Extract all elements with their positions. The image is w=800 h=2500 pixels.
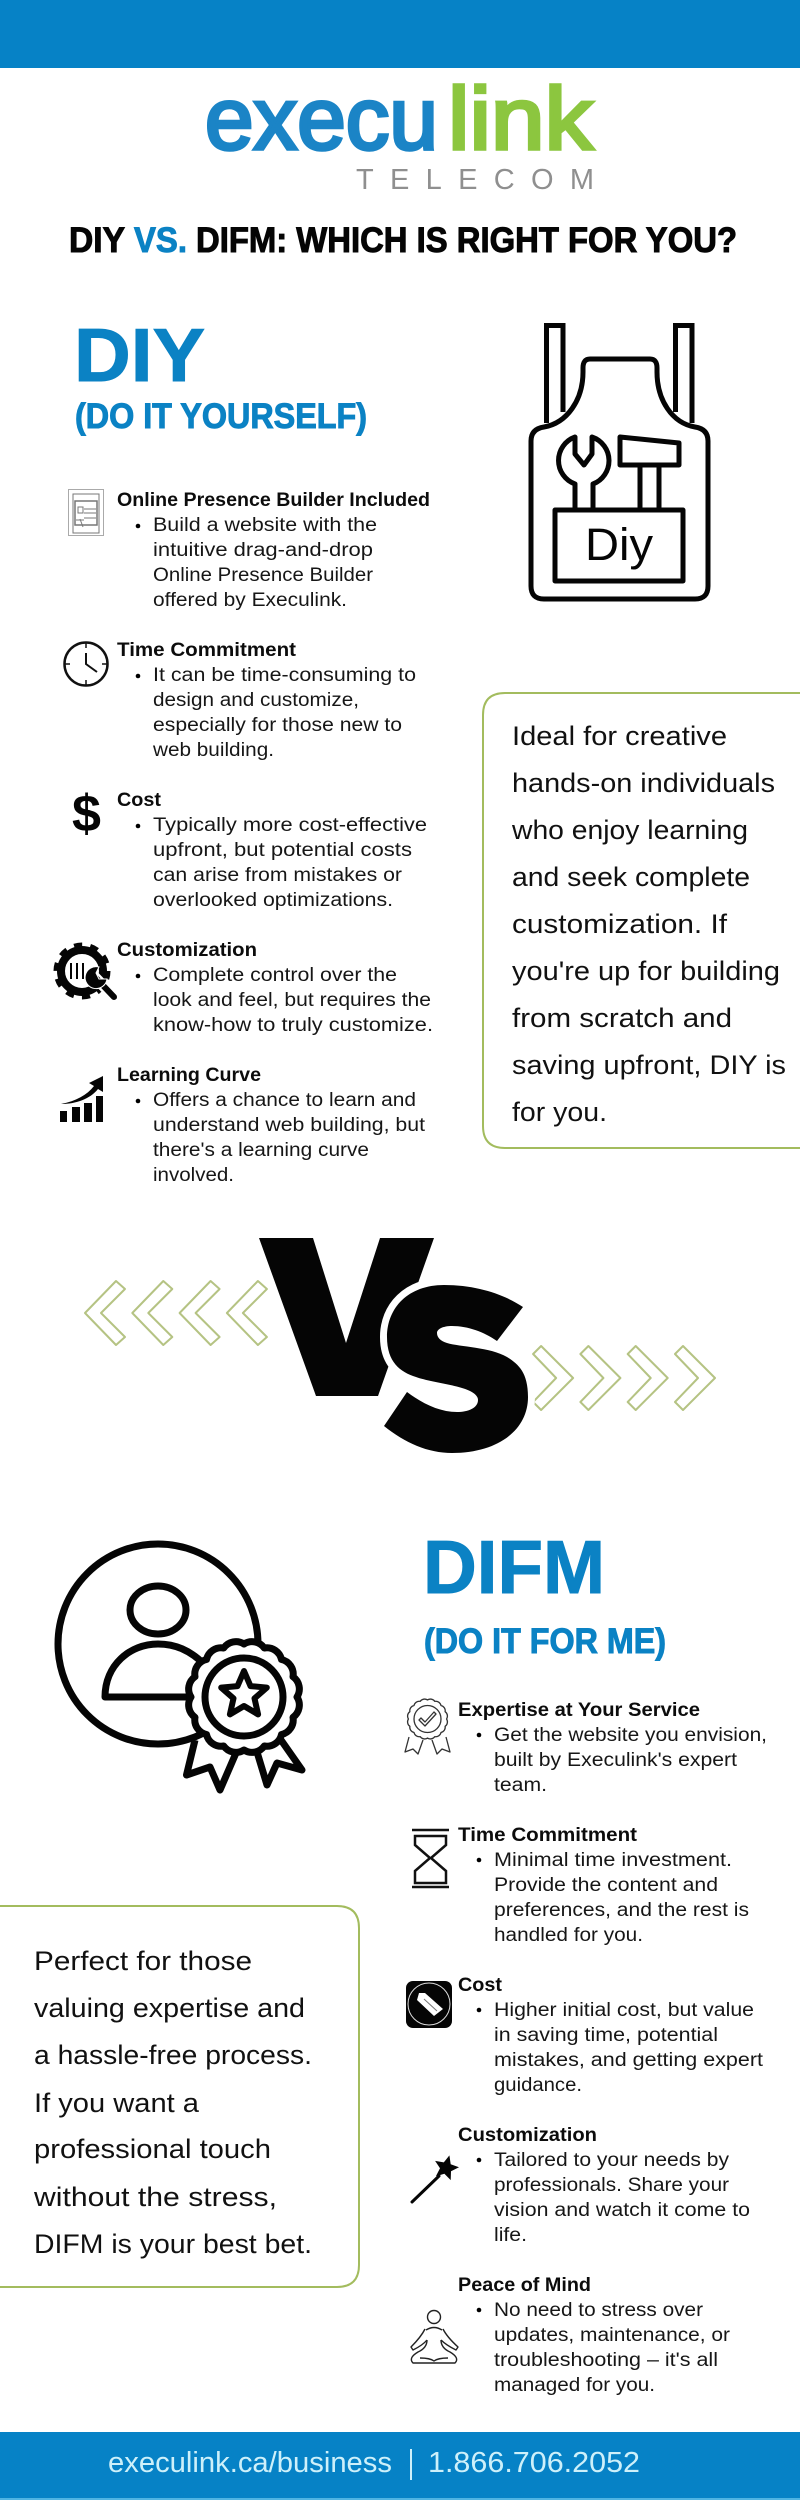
bullet text: Tailored to your needs by — [494, 2150, 730, 2171]
bullet text: preferences, and the rest is — [494, 1900, 749, 1921]
bullet text: Provide the content and — [494, 1875, 718, 1896]
callout: who DIY suits: and seek complete — [512, 862, 750, 892]
bullet text: guidance. — [494, 2075, 582, 2096]
bullet text — [477, 2150, 750, 2246]
panel: DIY feature list — [56, 489, 433, 1186]
bullet text: team. — [494, 1775, 547, 1796]
bullet text: understand web building, but — [153, 1115, 426, 1136]
bullet text: updates, maintenance, or — [494, 2325, 731, 2346]
item: time commitment — [412, 1824, 749, 1946]
arrows: right chevrons — [533, 1346, 715, 1410]
heading: Cost — [117, 789, 162, 811]
bullet text — [136, 815, 427, 911]
bullet text: upfront, but potential costs — [153, 840, 412, 861]
callout: who DIFM suits: If you want a — [34, 2088, 200, 2118]
callout: who DIFM suits: Perfect for those — [34, 1946, 252, 1976]
icon: price tag — [406, 1981, 452, 2028]
callout: who DIY suits: for you. — [512, 1097, 607, 1127]
bullet text: Typically more cost-effective — [153, 815, 427, 836]
bullet text: Get the website you envision, — [494, 1725, 767, 1746]
item: time commitment — [64, 639, 416, 761]
callout: who DIY suits: you're up for building — [512, 956, 780, 986]
bullet text — [477, 2300, 731, 2396]
callout: who DIY suits: who enjoy learning — [511, 815, 748, 845]
panel: DIFM feature list — [405, 1699, 767, 2396]
bullet text — [136, 1090, 426, 1186]
bullet text — [477, 1725, 767, 1796]
bullet text: professionals. Share your — [494, 2175, 730, 2196]
item: customization — [412, 2124, 750, 2246]
heading: Peace of Mind — [458, 2274, 591, 2296]
letter V — [259, 1238, 434, 1396]
bullet text: troubleshooting – it's all — [494, 2350, 718, 2371]
bullet text: web building. — [152, 740, 274, 761]
icon: check badge — [405, 1699, 450, 1754]
bullet text: mistakes, and getting expert — [494, 2050, 764, 2071]
bullet text — [136, 515, 377, 611]
title: DIY — [69, 221, 125, 260]
bullet text: built by Execulink's expert — [494, 1750, 738, 1771]
bullet text: It can be time-consuming to — [153, 665, 416, 686]
bullet text: in saving time, potential — [494, 2025, 718, 2046]
item: cost — [406, 1974, 764, 2096]
item: peace of mind — [411, 2274, 731, 2396]
bullet text: life. — [494, 2225, 527, 2246]
heading: DIFM: DIFM — [423, 1525, 605, 1609]
bullet text — [136, 665, 416, 761]
bullet text: Offers a chance to learn and — [153, 1090, 416, 1111]
callout: who DIFM suits: a hassle-free process. — [34, 2040, 312, 2070]
bullet text: Online Presence Builder — [153, 565, 374, 586]
heading: Time Commitment — [117, 639, 297, 661]
bullet text: Build a website with the — [153, 515, 377, 536]
heading: Expertise at Your Service — [458, 1699, 700, 1721]
bullet text: there's a learning curve — [153, 1140, 369, 1161]
icon: meditating person — [411, 2310, 458, 2363]
top banner — [0, 0, 800, 68]
item: learning curve — [60, 1064, 426, 1186]
icon: gear with wrench — [56, 946, 114, 997]
icon: growth chart — [60, 1076, 103, 1122]
heading: Customization — [117, 939, 257, 961]
callout: who DIY suits: Ideal for creative — [512, 721, 727, 751]
bullet text: Complete control over the — [153, 965, 397, 986]
footer bar — [0, 2432, 800, 2500]
item: online presence builder — [68, 489, 430, 611]
heading: Learning Curve — [117, 1064, 261, 1086]
icon: website builder — [68, 490, 104, 536]
icon: magic wand — [412, 2155, 459, 2202]
logo: Execulink Telecom: link — [448, 69, 594, 168]
bullet text: involved. — [153, 1165, 234, 1186]
icon: clock — [64, 642, 108, 686]
callout: who DIFM suits: valuing expertise and — [34, 1993, 305, 2023]
logo: Execulink Telecom: execu — [205, 69, 438, 168]
icon: apron with tools — [531, 326, 708, 599]
bullet text: can arise from mistakes or — [153, 865, 403, 886]
callout: who DIY suits: from scratch and — [512, 1003, 732, 1033]
item: customization — [56, 939, 433, 1036]
callout: who DIY suits — [483, 693, 800, 1148]
callout: who DIY suits: hands-on individuals — [512, 768, 775, 798]
subheading: do it yourself: (DO IT YOURSELF) — [75, 397, 367, 436]
arrows: left chevrons — [85, 1281, 267, 1345]
callout: who DIFM suits: professional touch — [34, 2134, 271, 2164]
title: DIFM: WHICH IS RIGHT FOR YOU? — [196, 221, 737, 260]
bullet text — [136, 965, 433, 1036]
bullet text: look and feel, but requires the — [153, 990, 431, 1011]
callout: who DIY suits: customization. If — [512, 909, 728, 939]
footer contact text: execulink.ca/business — [108, 2447, 392, 2479]
bullet text: managed for you. — [494, 2375, 655, 2396]
heading: Online Presence Builder Included — [117, 489, 430, 511]
logo: Execulink Telecom — [205, 69, 594, 196]
footer contact text: 1.866.706.2052 — [428, 2447, 640, 2479]
item: expertise — [405, 1699, 767, 1796]
bullet text — [477, 2000, 764, 2096]
bullet text: especially for those new to — [153, 715, 402, 736]
bullet text — [477, 1850, 749, 1946]
heading: Cost — [458, 1974, 503, 1996]
bullet text: No need to stress over — [494, 2300, 704, 2321]
icon: apron with tools: Diy — [585, 519, 654, 570]
bullet text: Higher initial cost, but value — [494, 2000, 754, 2021]
title: VS. — [134, 221, 187, 260]
bullet text: design and customize, — [153, 690, 359, 711]
callout: who DIFM suits — [0, 1906, 359, 2287]
icon: hourglass — [412, 1830, 449, 1887]
heading: Customization — [458, 2124, 597, 2146]
letter S — [384, 1285, 528, 1453]
bullet text: handled for you. — [494, 1925, 643, 1946]
bullet text: vision and watch it come to — [494, 2200, 750, 2221]
bullet text: overlooked optimizations. — [153, 890, 393, 911]
callout: who DIY suits: saving upfront, DIY is — [512, 1050, 786, 1080]
heading: Time Commitment — [458, 1824, 638, 1846]
bullet text: know-how to truly customize. — [153, 1015, 433, 1036]
subheading: do it for me: (DO IT FOR ME) — [424, 1622, 666, 1661]
bullet text: Minimal time investment. — [494, 1850, 732, 1871]
callout: who DIFM suits: DIFM is your best bet. — [34, 2229, 312, 2259]
graphic: VS with chevrons — [85, 1238, 715, 1453]
icon: dollar sign: $ — [72, 785, 101, 843]
bullet text: intuitive drag-and-drop — [153, 540, 373, 561]
heading: DIY: DIY — [74, 313, 205, 397]
icon: person with award badge — [58, 1544, 302, 1790]
bullet text: offered by Execulink. — [153, 590, 347, 611]
callout: who DIFM suits: without the stress, — [33, 2182, 277, 2212]
logo: Execulink Telecom: TELECOM — [356, 164, 594, 196]
footer contact text — [108, 2447, 640, 2480]
item: cost — [72, 785, 427, 911]
